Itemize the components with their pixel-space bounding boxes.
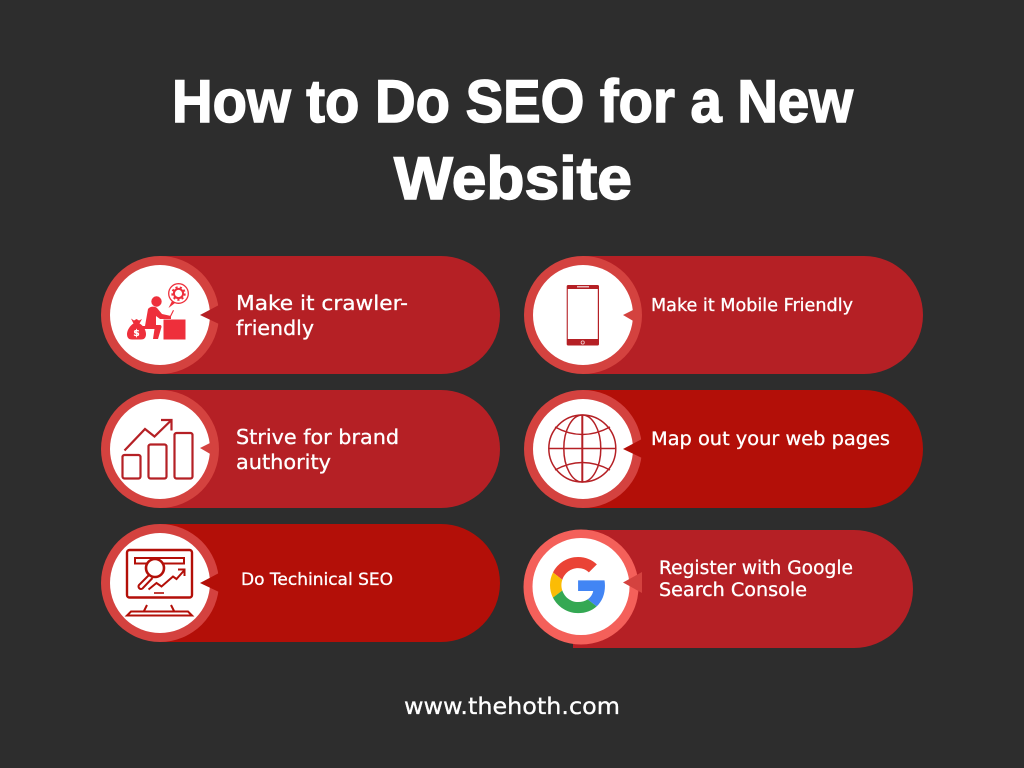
label: make it crawler-friendly [236,291,408,340]
label: strive for brand authority [236,425,399,474]
label: strive for brand authority: authority [236,450,331,474]
label: make it mobile friendly: Make it Mobile Friendly [651,296,853,316]
title: How to Do SEO for a New [172,68,853,135]
panel: map out your web pages [524,390,923,508]
label: make it crawler-friendly: Make it crawler- [236,291,408,315]
panel: register with google search console [524,530,913,648]
label: strive for brand authority: Strive for brand [236,425,399,449]
icon: rising bar chart [122,420,192,478]
icon: smartphone [567,285,599,346]
icon: person at desk with gear and money bag [127,284,188,340]
footer url: www.thehoth.com [404,694,620,720]
panel: do technical seo [101,524,500,642]
panel: make it mobile friendly [524,256,923,374]
panel: make it crawler-friendly: $ [133,329,140,339]
label: register with google search console: Search Console [659,580,807,601]
label: register with google search console: Register with Google [659,558,853,579]
icon: google g logo [550,557,605,613]
icon: monitor with magnifier and trend [127,550,192,616]
panel: strive for brand authority [101,390,500,508]
panel: make it crawler-friendly [101,256,500,374]
label: map out your web pages: Map out your web pages [651,429,890,450]
icon: globe [549,415,616,482]
title [172,68,853,212]
label: register with google search console [659,558,853,601]
label: make it crawler-friendly: friendly [236,316,314,340]
label: do technical seo: Do Techinical SEO [241,570,393,589]
title: Website [394,145,632,212]
